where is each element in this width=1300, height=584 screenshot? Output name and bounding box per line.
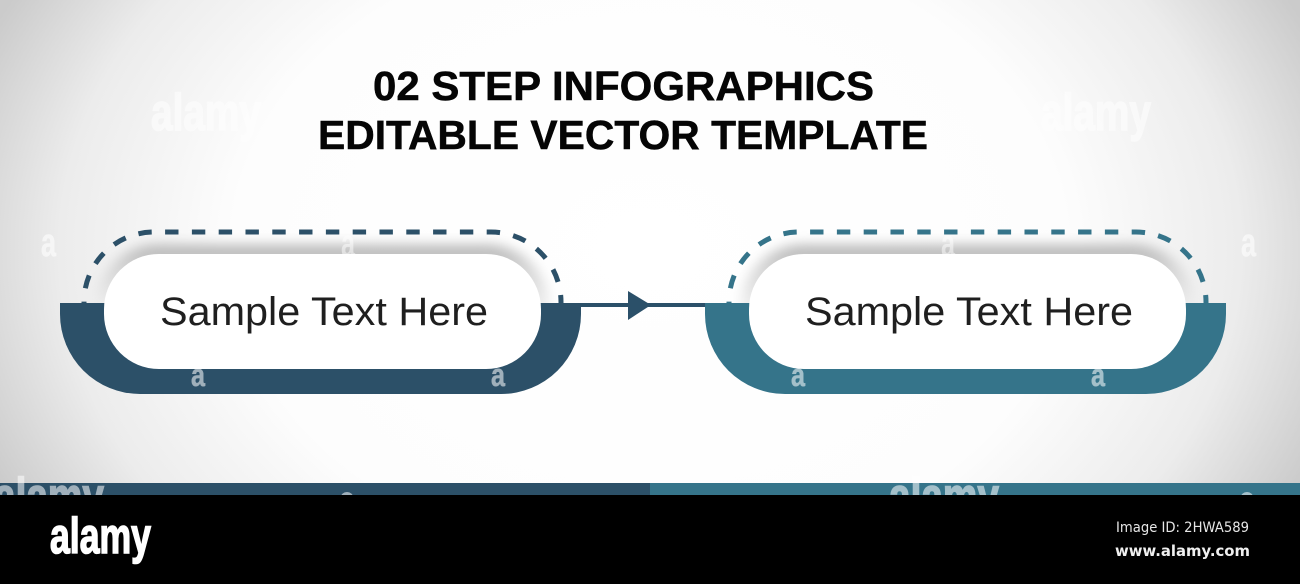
step 2 base shape [705,303,1226,394]
watermarks: a [1091,357,1105,393]
step 1 watermark mark: a [341,223,356,265]
watermarks: a [191,357,205,393]
step 1 card [60,223,581,394]
watermarks: a [1241,221,1257,265]
website: www.alamy.com [1115,542,1250,560]
black footer bar [0,495,1300,584]
strip watermarks: alamy [889,468,999,524]
step 2 label: Sample Text Here [805,290,1133,334]
watermarks: alamy [1041,84,1151,142]
step 1 label: Sample Text Here [160,290,488,334]
strip watermarks [0,468,1253,524]
watermarks: a [41,221,57,265]
connector arrow [580,291,706,320]
step 2 watermark mark: a [941,223,956,265]
watermarks: a [491,357,505,393]
step 1 shadow ring [101,238,550,303]
step 2 white pill [749,254,1186,369]
title: EDITABLE VECTOR TEMPLATE [318,112,928,158]
watermarks [41,84,1257,393]
title [318,63,928,158]
step 1 dashed arc [84,232,561,303]
watermarks: a [791,357,805,393]
step 1 white pill [104,254,541,369]
step 2 shadow ring [740,238,1190,303]
image id: Image ID: 2HWA589 [1116,520,1249,536]
step 2 card [705,223,1226,394]
alamy logo: alamy [50,508,151,564]
step 1 base shape [60,303,581,394]
step 2 dashed arc [729,232,1206,303]
bottom colour strip [0,483,1300,495]
title: 02 STEP INFOGRAPHICS [373,63,874,109]
watermarks: alamy [151,84,261,142]
